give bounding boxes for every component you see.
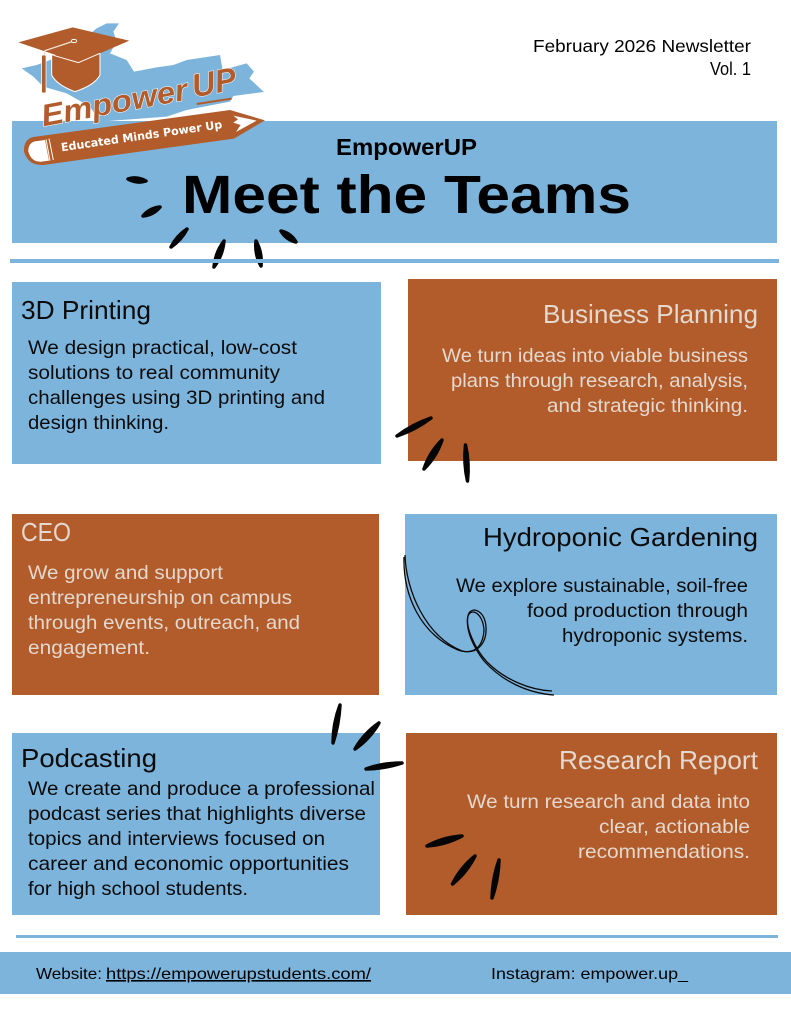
text: Hydroponic Gardening description: food production through [527, 600, 748, 622]
text: Research Report description: We turn research and data into [467, 791, 750, 813]
text: Podcasting description: for high school students. [28, 878, 248, 900]
footer bar [0, 952, 791, 994]
text: Research Report description: recommendations. [578, 841, 750, 863]
newsletter date and volume [533, 36, 751, 79]
logo graduation cap [18, 27, 129, 93]
panel: header banner [12, 121, 777, 243]
text: Podcasting description: topics and interviews focused on [28, 828, 325, 850]
newsletter date and volume: February 2026 Newsletter [533, 36, 751, 56]
text: Business Planning description: plans through research, analysis, [451, 370, 748, 392]
panel: Research Report [406, 733, 777, 915]
title: Meet the Teams [182, 165, 631, 225]
instagram handle: Instagram: empower.up_ [491, 966, 689, 983]
website link: Website: [36, 966, 102, 983]
heading: Hydroponic Gardening: Hydroponic Gardening [483, 522, 758, 552]
accent strokes: Podcasting [333, 705, 402, 769]
text: 3D Printing description: challenges using 3D printing and [28, 387, 325, 409]
panel: Business Planning [408, 279, 777, 461]
text: CEO description [28, 562, 300, 659]
decorative swirl [404, 555, 554, 695]
logo wordmark [38, 60, 239, 133]
text: Podcasting description [28, 778, 375, 900]
text: Hydroponic Gardening description [456, 575, 748, 647]
heading: CEO: CEO [21, 517, 71, 547]
heading: 3D Printing: 3D Printing [21, 295, 151, 325]
accent strokes: Research Report [427, 836, 499, 898]
heading: Podcasting: Podcasting [21, 743, 157, 773]
logo: EmpowerUP [18, 23, 265, 165]
text: 3D Printing description [28, 337, 325, 434]
text: Business Planning description [442, 345, 748, 417]
panel: Podcasting [12, 733, 380, 915]
panel: 3D Printing [12, 282, 381, 464]
panel: Hydroponic Gardening [405, 514, 777, 695]
text: 3D Printing description: design thinking. [28, 412, 169, 434]
text: Business Planning description: and strategic thinking. [547, 395, 748, 417]
text: Podcasting description: We create and produce a professional [28, 778, 375, 800]
text: Business Planning description: We turn ideas into viable business [442, 345, 748, 367]
text: CEO description: We grow and support [28, 562, 224, 584]
accent strokes: Business Planning [397, 418, 468, 481]
text: CEO description: entrepreneurship on campus [28, 587, 292, 609]
text: Research Report description: clear, actionable [599, 816, 750, 838]
text: 3D Printing description: We design practical, low-cost [28, 337, 298, 359]
text: CEO description: engagement. [28, 637, 150, 659]
text: Research Report description [467, 791, 750, 863]
text: 3D Printing description: solutions to real community [28, 362, 280, 384]
text: Podcasting description: career and economic opportunities [28, 853, 349, 875]
title accent strokes [128, 178, 296, 267]
text: Hydroponic Gardening description: hydroponic systems. [562, 625, 748, 647]
newsletter date and volume: Vol. 1 [710, 59, 751, 79]
logo pencil banner: Educated Minds Power Up [60, 117, 223, 154]
text: Podcasting description: podcast series that highlights diverse [28, 803, 366, 825]
text: CEO description: through events, outreach, and [28, 612, 300, 634]
logo wordmark: UP [189, 60, 239, 104]
panel: CEO [12, 514, 379, 695]
heading: Research Report: Research Report [559, 745, 759, 775]
website link: https://empowerupstudents.com/ [106, 966, 372, 983]
logo map shape [22, 23, 264, 122]
text: Hydroponic Gardening description: We explore sustainable, soil-free [456, 575, 748, 597]
logo pencil banner [24, 110, 265, 165]
website link [36, 966, 372, 983]
heading: Business Planning: Business Planning [543, 299, 758, 329]
logo wordmark: Empower [38, 72, 193, 133]
eyebrow: EmpowerUP: EmpowerUP [336, 134, 477, 160]
